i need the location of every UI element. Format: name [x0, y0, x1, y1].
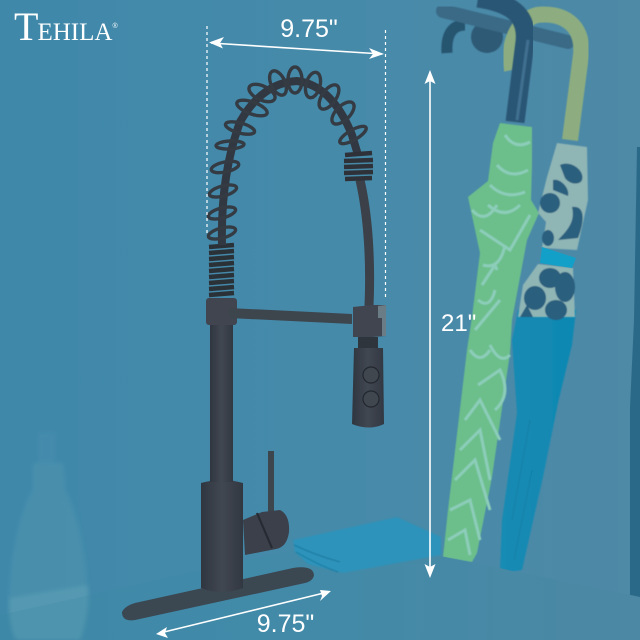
patterned umbrella upper	[518, 143, 588, 320]
side handle	[243, 451, 289, 555]
hose arc	[222, 81, 358, 245]
spray buttons	[363, 367, 379, 407]
post	[210, 322, 233, 482]
deck plate	[122, 567, 314, 620]
faucet base cylinder	[201, 480, 243, 592]
height label: 21"	[441, 310, 476, 337]
folded towel	[293, 517, 441, 573]
top width arrow	[209, 37, 384, 59]
coat rack	[443, 11, 568, 53]
dark strip at right edge	[630, 147, 640, 600]
top width label: 9.75"	[280, 15, 338, 43]
spiral coils	[207, 67, 368, 241]
logo: TEHILA	[14, 4, 112, 49]
registered mark: ®	[112, 22, 118, 30]
soap bottle base	[9, 585, 89, 640]
blue umbrella strap	[540, 247, 576, 268]
bottom width arrow	[156, 590, 331, 638]
blue umbrella lower	[500, 310, 576, 572]
right collar	[353, 305, 386, 337]
yellow umbrella handle	[511, 15, 581, 140]
lower right hose	[360, 180, 370, 306]
right dashed guide	[384, 30, 386, 299]
spray head	[352, 348, 384, 428]
dark umbrella handle	[478, 0, 528, 122]
right coil stack	[344, 153, 373, 179]
height arrow	[424, 70, 436, 578]
cross bar	[229, 308, 352, 324]
faucet	[122, 67, 386, 620]
lower spring	[209, 245, 234, 295]
counter top	[0, 540, 640, 640]
soap bottle	[9, 432, 88, 640]
left dashed guide	[206, 26, 208, 236]
bottom width label: 9.75"	[257, 610, 314, 638]
green umbrella	[443, 123, 539, 562]
top collar	[206, 298, 237, 325]
